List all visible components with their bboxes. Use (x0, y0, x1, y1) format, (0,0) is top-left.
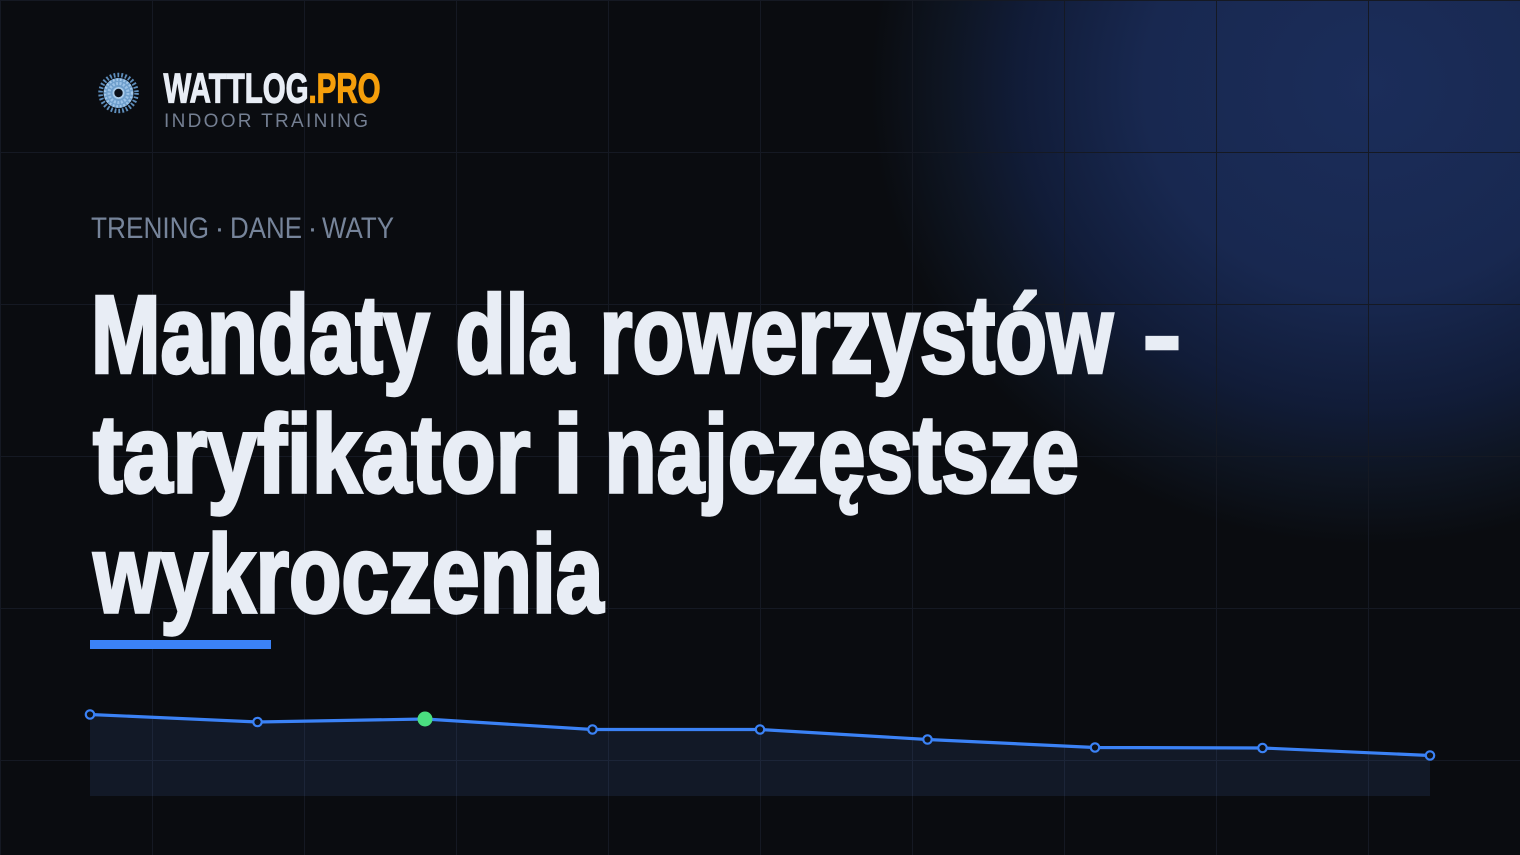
title: najczęstsze (604, 393, 1079, 516)
title: Mandaty (91, 274, 430, 396)
eyebrow: TRENING (91, 212, 209, 245)
eyebrow: WATY (322, 212, 394, 245)
title (91, 274, 1180, 636)
chart line (90, 714, 1430, 756)
chart area (90, 714, 1430, 796)
eyebrow (91, 212, 394, 245)
title: i (553, 393, 583, 516)
title: rowerzystów (600, 274, 1113, 396)
eyebrow: · (214, 212, 224, 245)
title: dla (456, 274, 575, 396)
brand tagline: INDOOR TRAINING (164, 111, 368, 132)
title: wykroczenia (93, 513, 604, 636)
title underline (90, 640, 271, 649)
chart points (86, 710, 1434, 760)
icon: cassette cog (100, 75, 136, 111)
eyebrow: · (308, 212, 318, 245)
brand name: WATTLOG.PRO (164, 64, 380, 112)
eyebrow: DANE (230, 212, 302, 245)
logo (100, 64, 380, 132)
highlighted point (418, 712, 432, 726)
line chart (86, 710, 1434, 796)
title: taryfikator (93, 393, 530, 516)
title: – (1144, 274, 1180, 396)
